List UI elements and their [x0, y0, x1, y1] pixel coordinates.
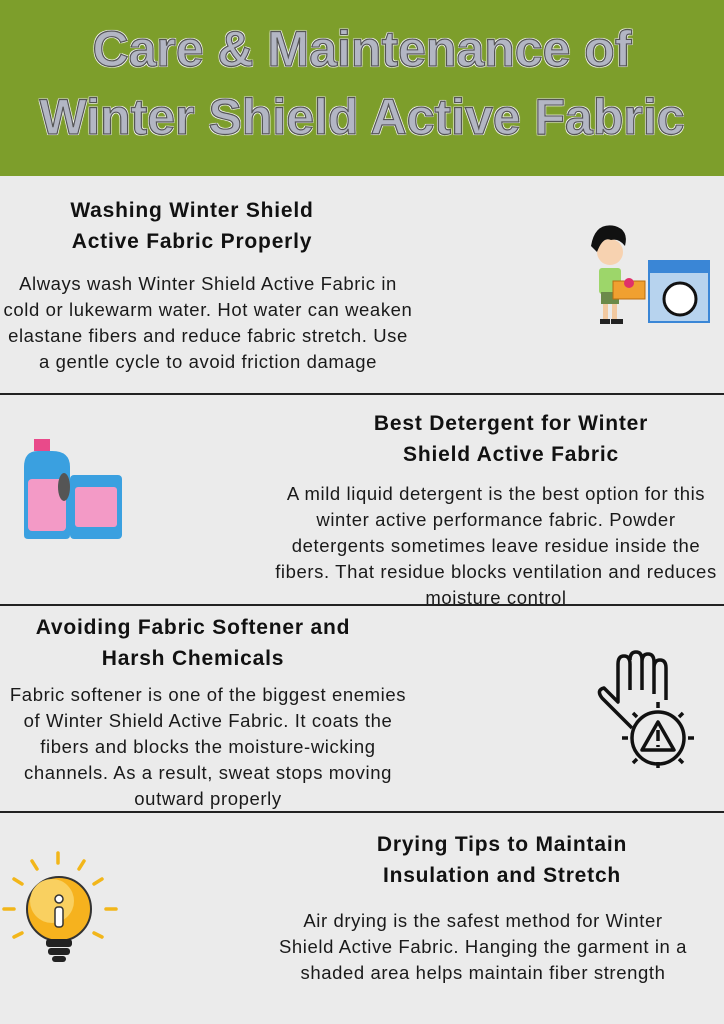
title — [38, 21, 685, 145]
heading: detergent — [374, 412, 648, 466]
text: softener: fibers and blocks the moisture-wicking — [40, 736, 376, 757]
text: detergent: winter active performance fabric. Powder — [316, 509, 676, 530]
text: detergent: moisture control — [425, 587, 567, 608]
text: detergent: A mild liquid detergent is the best option for this — [287, 483, 705, 504]
heading: softener: Harsh Chemicals — [102, 647, 284, 670]
heading: detergent: Best Detergent for Winter — [374, 412, 648, 435]
panel: washing — [4, 199, 710, 372]
panel: drying — [2, 833, 687, 983]
text: drying: shaded area helps maintain fiber strength — [300, 962, 666, 983]
text: softener — [10, 684, 406, 809]
text: washing — [4, 273, 412, 372]
text: softener: outward properly — [134, 788, 282, 809]
heading: drying: Insulation and Stretch — [383, 864, 621, 887]
text: washing: Always wash Winter Shield Active Fabric in — [19, 273, 397, 294]
text: detergent: detergents sometimes leave residue inside the — [292, 535, 700, 556]
icon: hand with warning gear — [598, 650, 694, 768]
text: detergent — [275, 483, 717, 608]
text: drying: Air drying is the safest method for Winter — [303, 910, 663, 931]
text: detergent: fibers. That residue blocks ventilation and reduces — [275, 561, 717, 582]
panel: detergent — [24, 412, 717, 608]
icon: light bulb — [2, 851, 118, 962]
title: Winter Shield Active Fabric — [39, 89, 685, 145]
text: washing: a gentle cycle to avoid friction damage — [39, 351, 377, 372]
text: washing: elastane fibers and reduce fabric stretch. Use — [8, 325, 408, 346]
icon: detergent bottles — [24, 439, 122, 539]
text: softener: of Winter Shield Active Fabric. It coats the — [24, 710, 392, 731]
panel: softener — [10, 616, 694, 809]
header banner — [0, 0, 724, 176]
heading: drying — [377, 833, 627, 887]
text: drying: Shield Active Fabric. Hanging the garment in a — [279, 936, 687, 957]
heading: detergent: Shield Active Fabric — [403, 443, 619, 466]
heading: washing — [70, 199, 314, 253]
text: drying — [279, 910, 687, 983]
text: softener: channels. As a result, sweat stops moving — [24, 762, 392, 783]
icon: boy with washing machine — [591, 225, 710, 324]
heading: drying: Drying Tips to Maintain — [377, 833, 627, 856]
text: softener: Fabric softener is one of the biggest enemies — [10, 684, 406, 705]
heading: softener: Avoiding Fabric Softener and — [36, 616, 350, 639]
title: Care & Maintenance of — [92, 21, 632, 77]
text: washing: cold or lukewarm water. Hot water can weaken — [4, 299, 412, 320]
heading: softener — [36, 616, 350, 670]
heading: washing: Active Fabric Properly — [72, 230, 312, 253]
heading: washing: Washing Winter Shield — [70, 199, 314, 222]
